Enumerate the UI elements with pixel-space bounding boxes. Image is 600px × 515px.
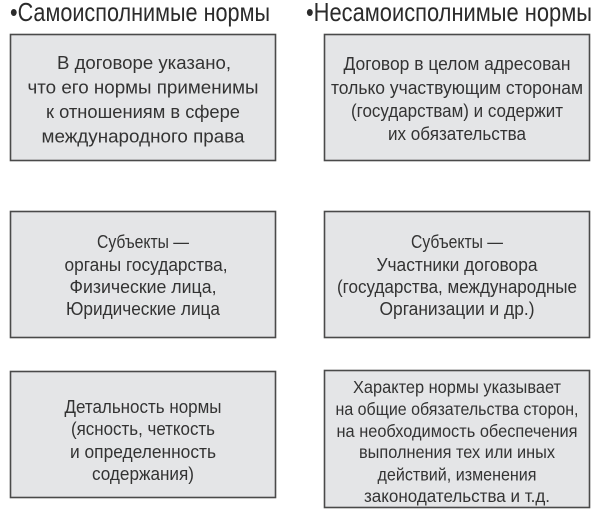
- panel: right row 1: [324, 34, 590, 160]
- panel: left row 1: к отношениям в сфере: [46, 101, 240, 122]
- panel: right row 1: (государствам) и содержит: [351, 100, 563, 121]
- panel: left row 1: международного права: [42, 126, 245, 146]
- panel: right row 2: Организации и др.): [380, 298, 534, 319]
- panel: right row 2: [324, 212, 590, 338]
- panel: left row 2: Физические лица,: [70, 276, 216, 297]
- panel: right row 1: Договор в целом адресован: [344, 53, 570, 74]
- panel: left row 3: [10, 372, 276, 498]
- panel: right row 3: выполнения тех или иных: [359, 442, 555, 462]
- panel: left row 1: [10, 34, 276, 160]
- panel: right row 3: на необходимость обеспечения: [336, 421, 578, 441]
- panel: right row 3: на общие обязательства сторон,: [336, 399, 578, 419]
- panel: right row 3: действий, изменения: [378, 464, 536, 484]
- panel: right row 3: Характер нормы указывает: [353, 377, 561, 397]
- panel: right row 2: (государства, международные: [337, 276, 577, 297]
- panel: left row 3: содержания): [92, 463, 194, 484]
- panel: left row 3: и определенность: [70, 441, 216, 462]
- panel: left row 3: Детальность нормы: [64, 396, 222, 417]
- panel: left row 2: органы государства,: [64, 254, 228, 275]
- panel: left row 2: Субъекты —: [97, 231, 189, 252]
- panel: left row 1: что его нормы применимы: [28, 76, 258, 98]
- panel: right row 1: их обязательства: [388, 123, 527, 144]
- panel: right row 3: законодательства и т.д.: [364, 486, 550, 506]
- panel: right row 3: [324, 370, 590, 508]
- panel: left row 2: Юридические лица: [66, 298, 221, 319]
- panel: left row 1: В договоре указано,: [57, 52, 231, 73]
- panel: left row 2: [10, 212, 276, 338]
- panel: right row 2: Субъекты —: [411, 231, 503, 252]
- panel: right row 2: Участники договора: [376, 254, 538, 275]
- panel: left row 3: (ясность, четкость: [71, 418, 215, 439]
- panel: right row 1: только участвующим сторонам: [331, 77, 583, 98]
